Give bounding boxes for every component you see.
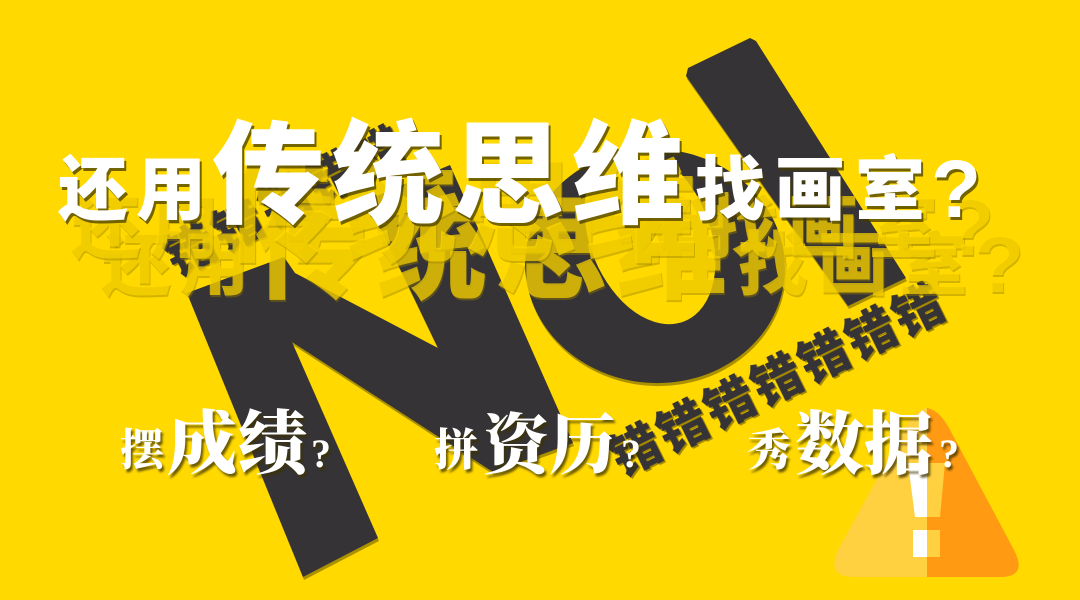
title echo near: 还用	[71, 189, 227, 267]
title echo far: ?	[974, 219, 1024, 310]
title: ?	[931, 144, 981, 235]
big word NO!	[187, 38, 906, 577]
rotated text: lower wrong marks: 错错错错错错错	[601, 274, 955, 487]
title echo near: 找画室	[708, 189, 948, 267]
title echo near	[71, 151, 994, 276]
question: compare credentials: 拼	[434, 426, 478, 475]
question: display data: ?	[939, 431, 959, 476]
title echo near: 传统思维	[225, 151, 705, 276]
question: compare credentials	[434, 410, 641, 483]
title: 还用	[58, 151, 214, 229]
warning triangle icon	[834, 408, 1019, 577]
letter O	[515, 128, 795, 394]
triangle right half	[927, 408, 1019, 577]
title echo far	[101, 188, 1024, 313]
exclamation yellow half	[927, 463, 945, 557]
exclamation white half	[908, 463, 927, 557]
question: display data: 数据	[795, 407, 933, 483]
question: show off grades: 成绩	[167, 407, 310, 484]
title echo near: ?	[944, 182, 994, 273]
question: compare credentials: 资历	[483, 410, 615, 483]
question: compare credentials: ?	[621, 431, 641, 476]
title: 找画室	[695, 151, 935, 229]
rotated text: upper wrong marks: 错错错错错	[156, 117, 417, 287]
exclamation bar	[686, 38, 906, 306]
title echo far: 还用	[101, 226, 257, 304]
title: 传统思维	[212, 113, 692, 238]
question: show off grades	[120, 407, 331, 484]
triangle left half	[834, 408, 927, 577]
title	[58, 113, 981, 238]
question: display data	[747, 407, 959, 483]
question: display data: 秀	[747, 426, 791, 475]
title echo far: 找画室	[738, 226, 978, 304]
title echo far: 传统思维	[255, 188, 735, 313]
letter N	[187, 165, 573, 577]
question: show off grades: 摆	[120, 426, 167, 475]
question: show off grades: ?	[311, 431, 331, 476]
